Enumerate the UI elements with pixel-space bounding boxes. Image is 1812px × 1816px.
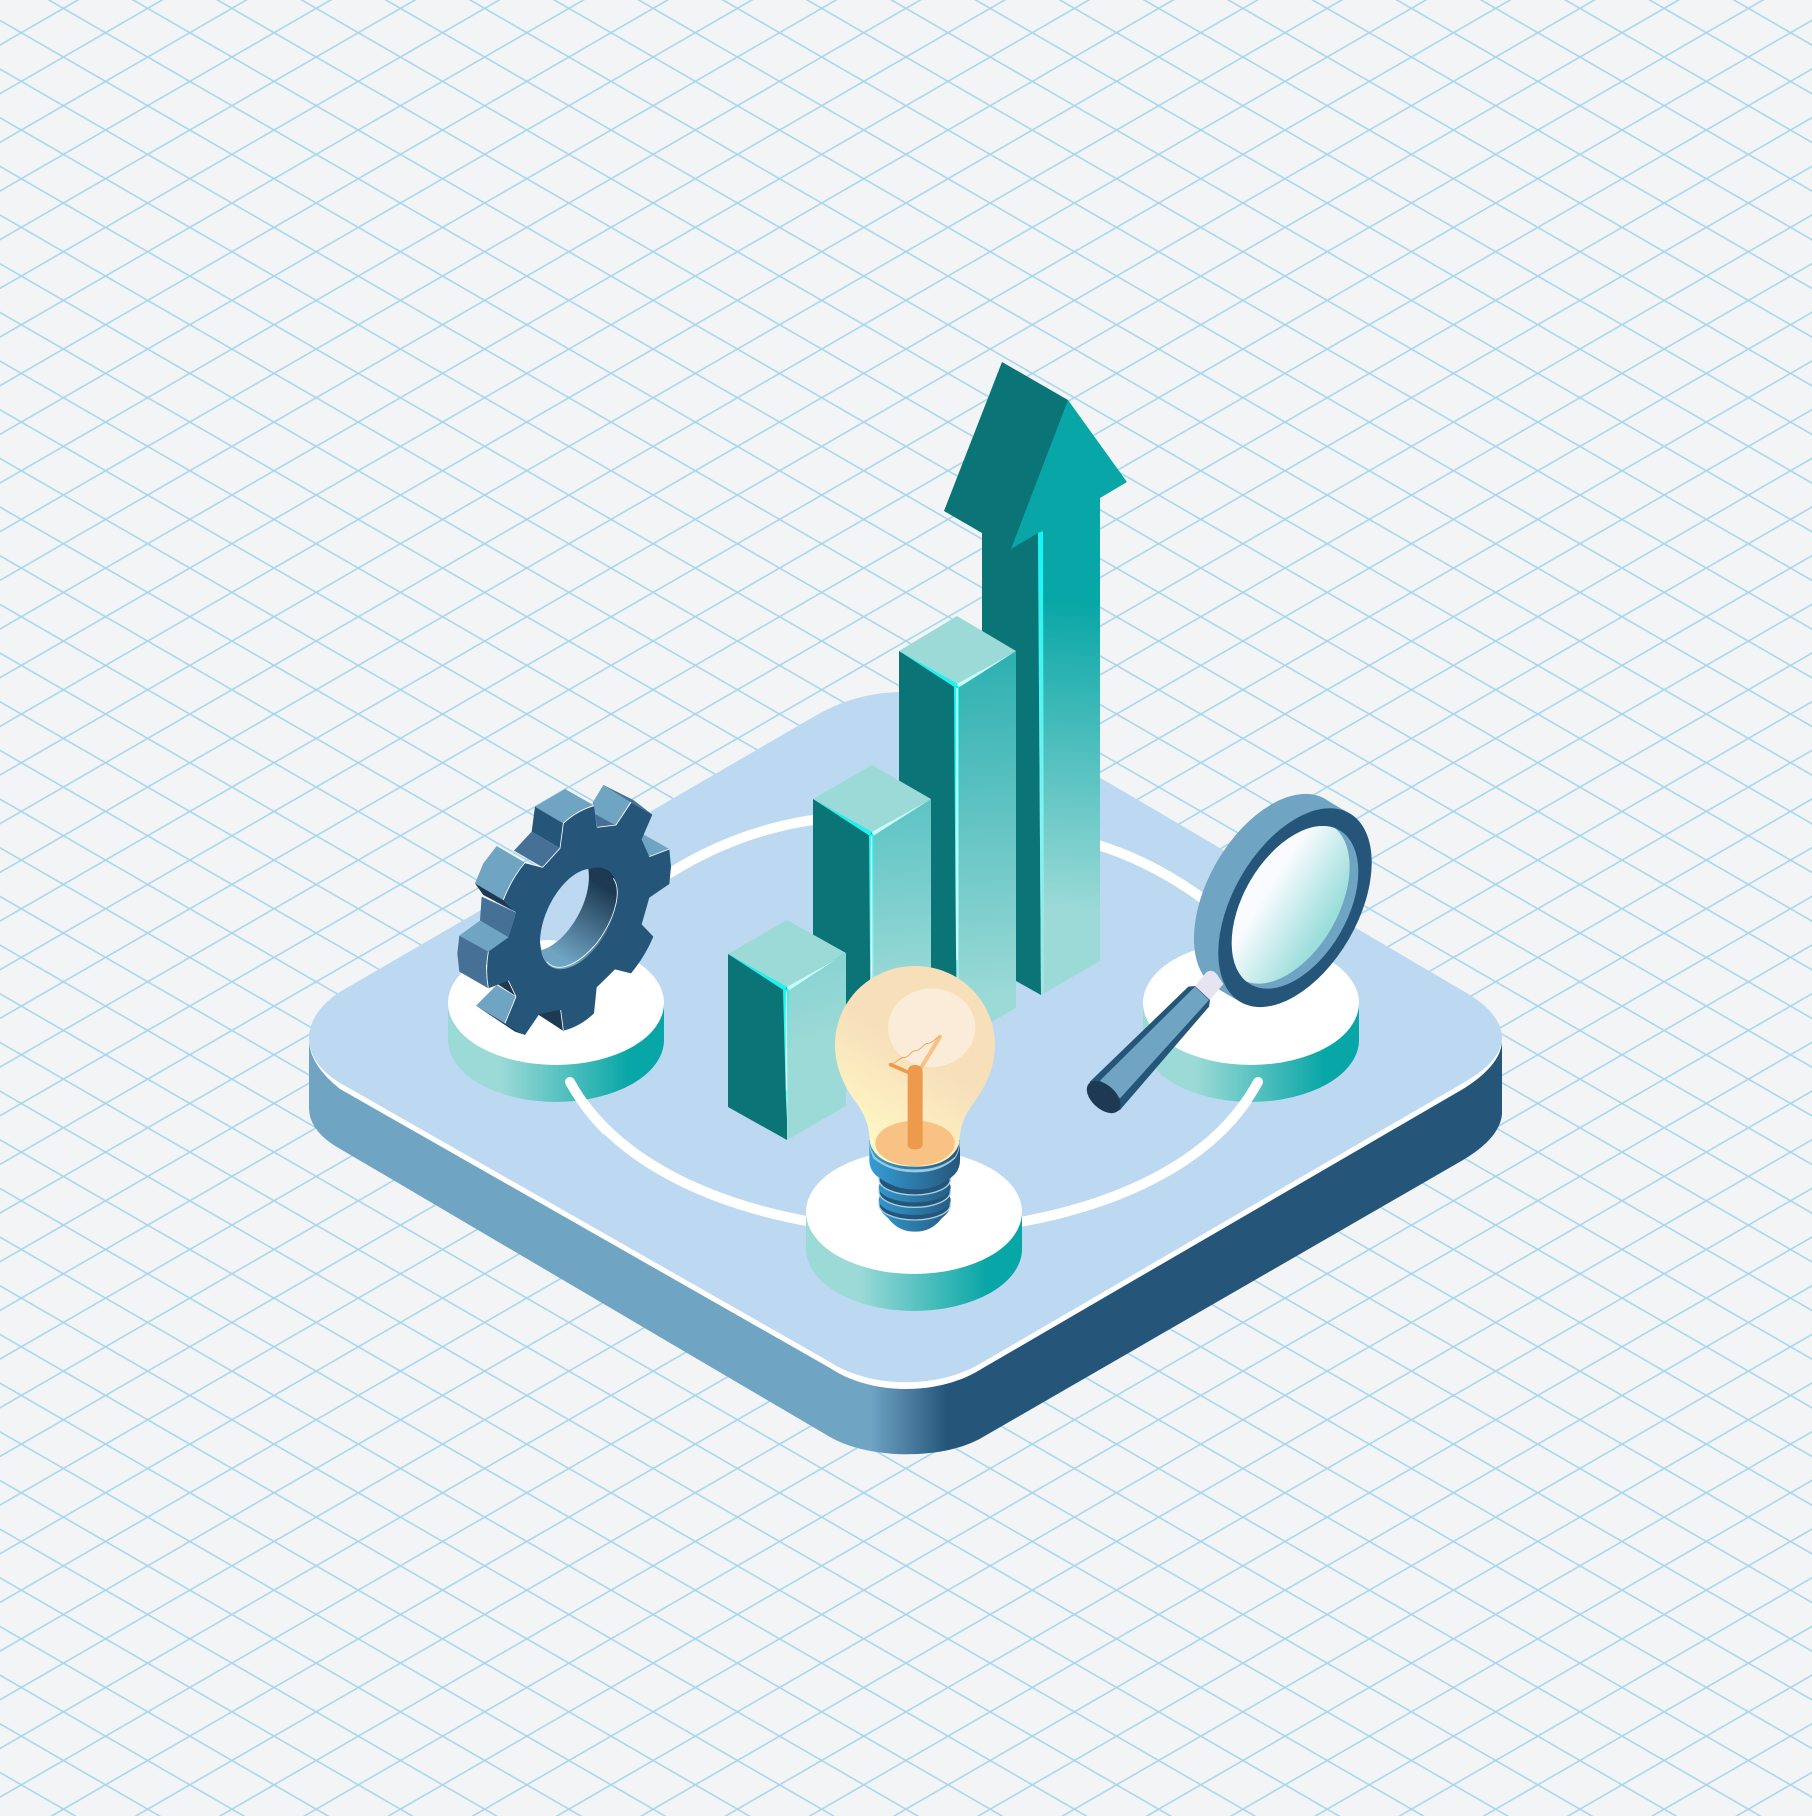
arrow highlight bbox=[1038, 531, 1044, 995]
disc: left pedestal bbox=[448, 941, 664, 1102]
platform top surface bbox=[309, 692, 1502, 1382]
bulb socket collar bbox=[869, 1140, 960, 1189]
magnifier inner wall bbox=[1205, 804, 1385, 1010]
bulb filament bbox=[891, 1037, 940, 1072]
icon: gear bbox=[457, 785, 671, 1035]
magnifier front ring bbox=[1187, 782, 1403, 1033]
chart: middle bar bbox=[813, 765, 931, 1070]
disc: right pedestal bbox=[1143, 941, 1359, 1102]
icon: magnifying glass bbox=[1086, 794, 1372, 1114]
handle end cap bbox=[1081, 1075, 1127, 1119]
chart: growth arrow bbox=[944, 362, 1127, 995]
bulb base bbox=[875, 1121, 955, 1166]
bar side dark bbox=[728, 954, 787, 1140]
platform bbox=[309, 692, 1502, 1454]
magnifier back rim bbox=[1162, 768, 1397, 1030]
gear front face bbox=[487, 802, 671, 1035]
gear hole bbox=[524, 855, 634, 982]
disc: bottom pedestal bbox=[806, 1150, 1022, 1311]
bar highlights bbox=[813, 799, 931, 1010]
platform white edge bbox=[309, 1037, 1502, 1389]
gear side faces bbox=[457, 785, 669, 1035]
arrow dark side bbox=[944, 362, 1068, 995]
bar side light bbox=[957, 651, 1016, 1042]
bulb glass bbox=[835, 966, 995, 1167]
bar side dark bbox=[813, 799, 872, 1070]
bar top bbox=[899, 616, 1016, 684]
bar highlights bbox=[728, 954, 838, 1140]
bulb highlight bbox=[888, 988, 975, 1067]
bar top bbox=[728, 920, 846, 987]
bar side dark bbox=[899, 651, 957, 1042]
bar side light bbox=[872, 799, 931, 1070]
chart: small bar bbox=[728, 920, 846, 1140]
bar top bbox=[813, 765, 931, 832]
platform side bbox=[309, 1037, 1502, 1454]
magnifier lens bbox=[1232, 826, 1350, 984]
icon: light bulb bbox=[835, 966, 995, 1232]
chart: tallest bar bbox=[899, 616, 1016, 1042]
bulb stem bbox=[908, 1065, 923, 1149]
magnifier ferrule bbox=[1195, 971, 1223, 1000]
arrow front face bbox=[1011, 400, 1127, 995]
bar highlights bbox=[899, 651, 1016, 1042]
bulb thread bbox=[879, 1164, 951, 1232]
magnifier handle bbox=[1081, 986, 1210, 1119]
gear white edges bbox=[487, 802, 669, 1031]
bulb collar rim bbox=[869, 1137, 960, 1172]
bar side light bbox=[787, 953, 846, 1140]
connecting ring bbox=[570, 819, 1258, 1222]
re-draw ring end over left and right discs bbox=[570, 1082, 1258, 1130]
